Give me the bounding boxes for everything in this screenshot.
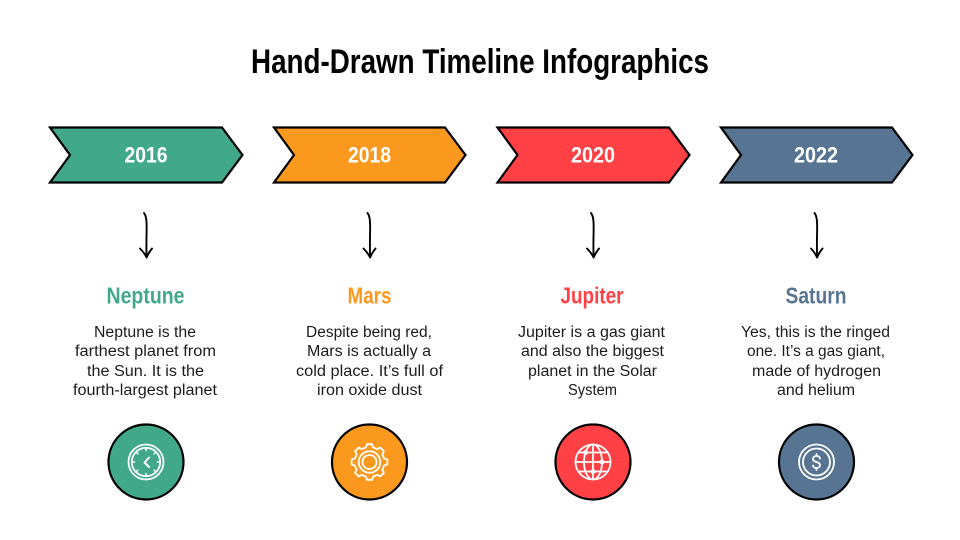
chevron: 2016: 2016 xyxy=(124,142,168,168)
text: Saturn description: Yes, this is the ringed xyxy=(741,324,890,341)
text: Jupiter description: planet in the Solar xyxy=(528,363,657,380)
text: Mars description: cold place. It’s full of xyxy=(296,363,444,380)
text: Saturn description: made of hydrogen xyxy=(752,363,881,380)
icon: gear xyxy=(332,424,407,500)
icon: dollar coin xyxy=(779,424,854,500)
chevron: 2016 xyxy=(50,128,242,182)
icon: globe xyxy=(556,424,630,500)
text: Neptune description: fourth-largest planet xyxy=(73,382,218,399)
column: 2022 Saturn xyxy=(721,128,912,500)
heading: Neptune: Neptune xyxy=(106,282,184,308)
column: 2016 Neptune xyxy=(50,128,242,500)
heading: Mars: Mars xyxy=(348,282,392,308)
text: Neptune description: Neptune is the xyxy=(94,324,196,341)
arrow: down xyxy=(140,213,152,258)
text: Mars description: Mars is actually a xyxy=(307,343,431,360)
chevron: 2022: 2022 xyxy=(794,142,838,168)
text: Mars description: Despite being red, xyxy=(306,324,432,341)
arrow: down xyxy=(587,213,599,258)
chevron: 2018: 2018 xyxy=(348,142,391,168)
text: Mars description: iron oxide dust xyxy=(317,382,423,399)
title: Hand-Drawn Timeline Infographics xyxy=(251,43,709,81)
text: Neptune description: the Sun. It is the xyxy=(87,363,204,380)
text: Neptune description: farthest planet from xyxy=(75,343,216,360)
text: Jupiter description: Jupiter is a gas giant xyxy=(518,324,666,341)
text: Jupiter description: and also the biggest xyxy=(521,343,665,360)
chevron: 2020: 2020 xyxy=(571,142,615,168)
heading: Saturn: Saturn xyxy=(786,282,846,308)
chevron: 2018 xyxy=(274,128,466,182)
arrow: down xyxy=(811,213,822,258)
arrow: down xyxy=(364,213,376,258)
column: 2018 Mars xyxy=(274,128,466,500)
chevron: 2020 xyxy=(498,128,690,182)
text: Saturn description: and helium xyxy=(777,382,855,399)
text: Saturn description: one. It’s a gas giant, xyxy=(747,343,885,360)
chevron: 2022 xyxy=(721,128,912,182)
heading: Jupiter: Jupiter xyxy=(560,282,624,308)
text: Jupiter description: System xyxy=(568,382,617,399)
column: 2020 Jupiter xyxy=(498,128,690,500)
icon: clock xyxy=(108,424,184,500)
